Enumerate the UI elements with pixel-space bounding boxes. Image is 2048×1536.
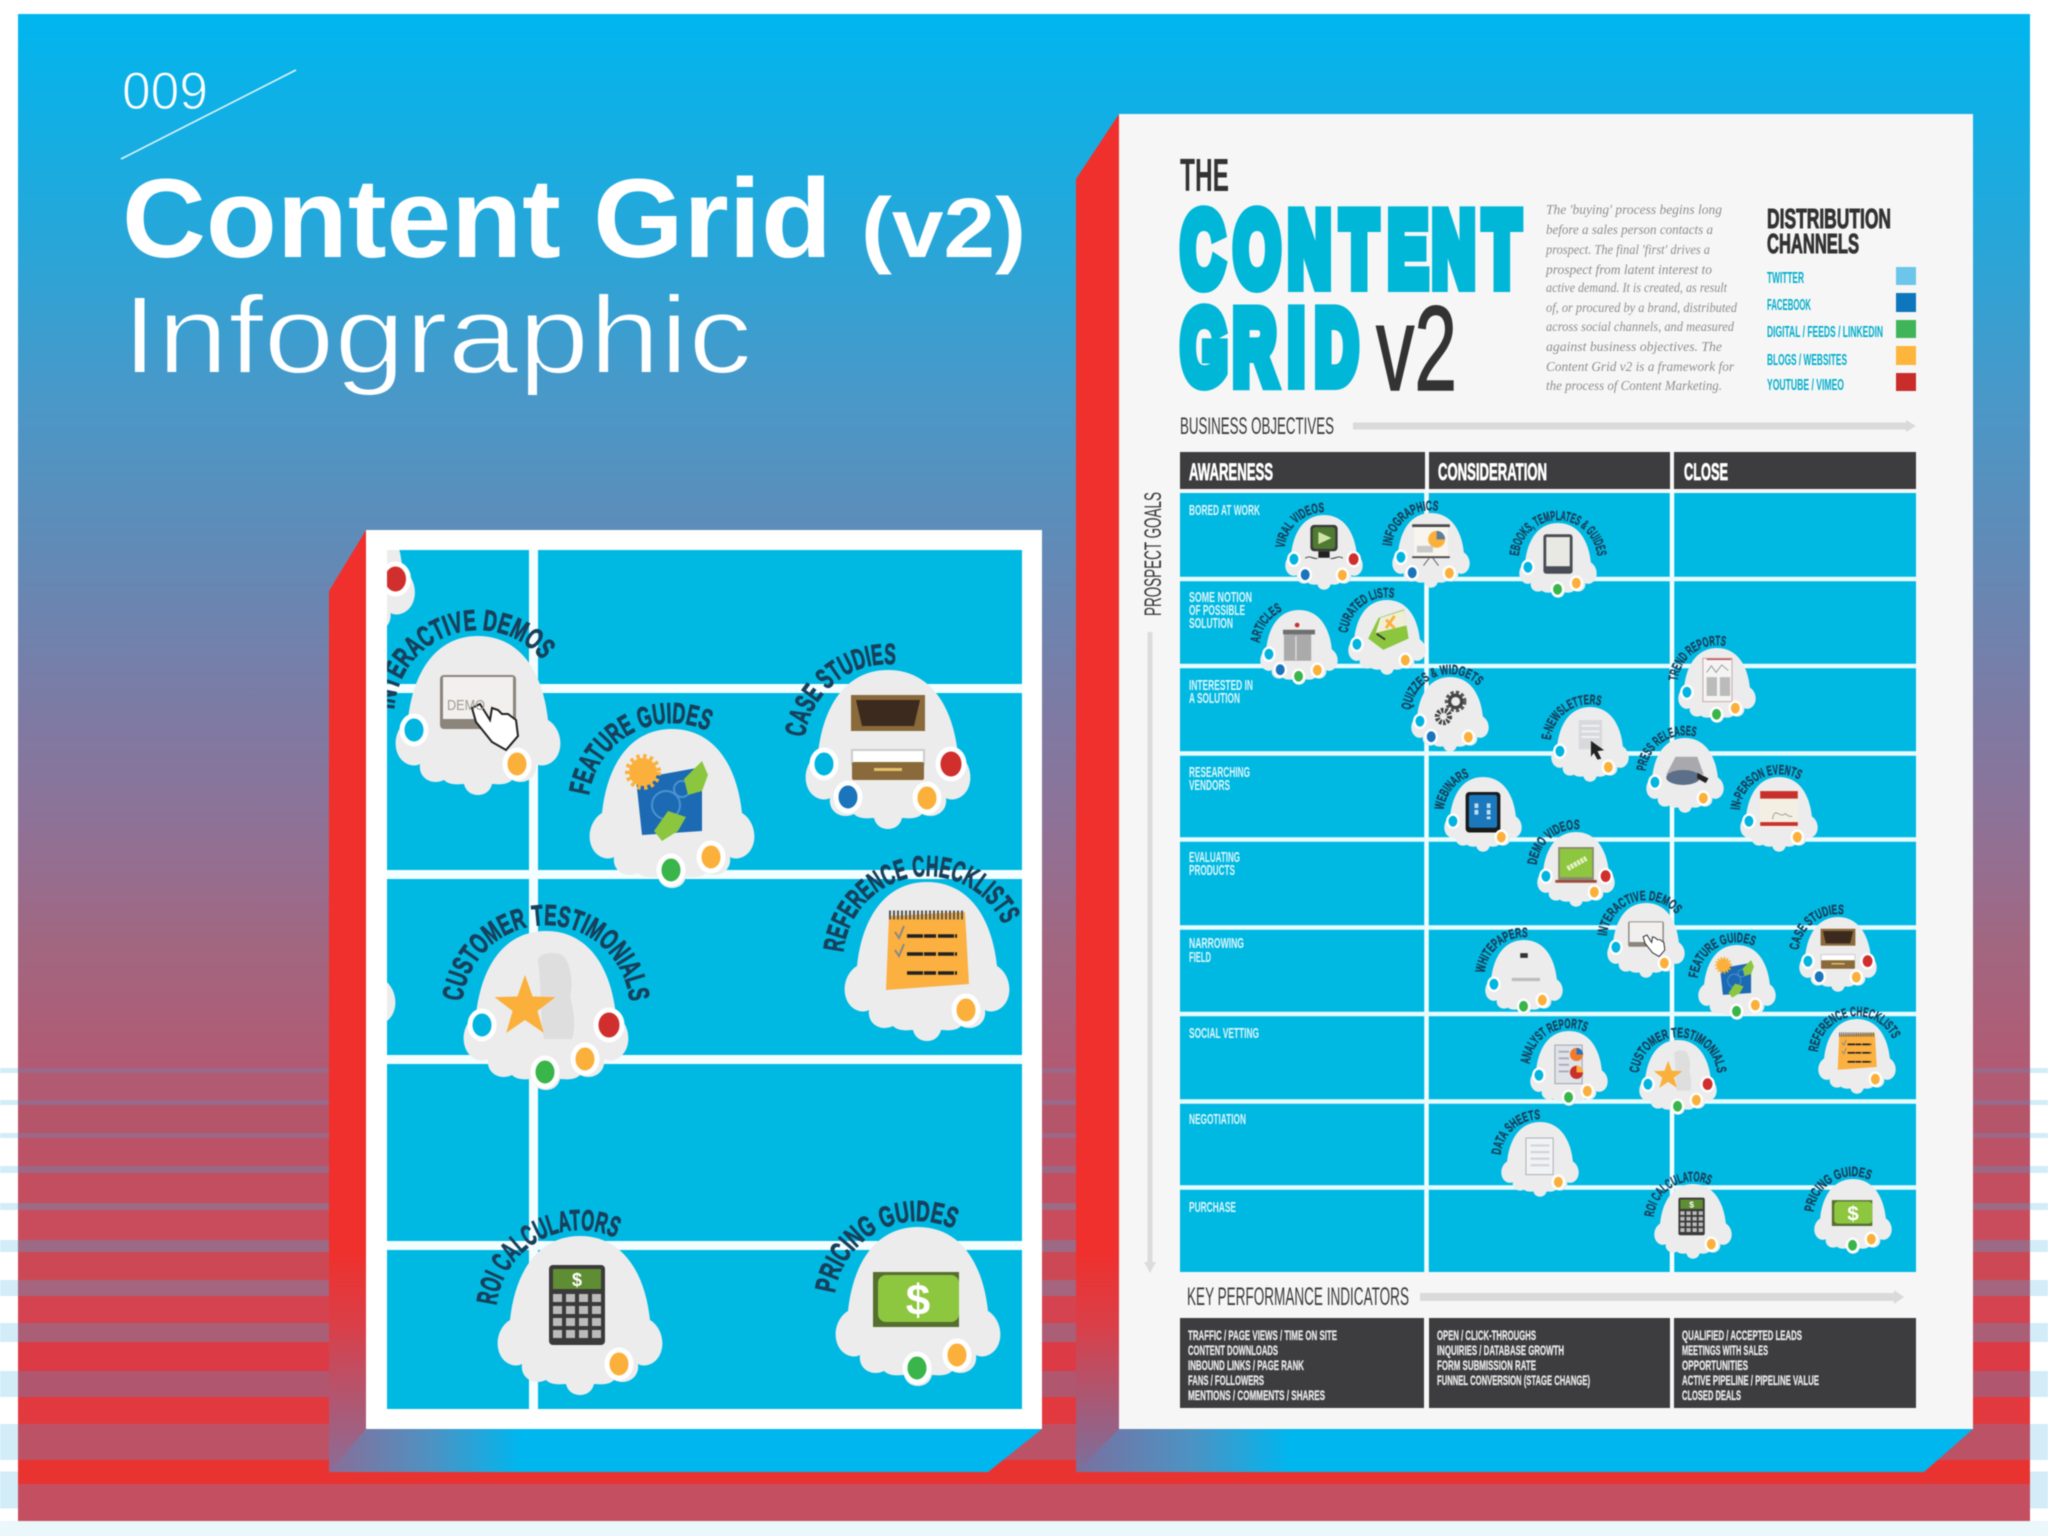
business objectives label and arrow: BUSINESS OBJECTIVES (1180, 413, 1334, 440)
kpi box: awareness: FANS / FOLLOWERS (1188, 1373, 1264, 1388)
bubble: customer testimonials small: CUSTOMER TESTIMONIALS (1628, 1026, 1728, 1074)
bubble: case studies (784, 642, 972, 830)
poster heading (1180, 149, 1520, 416)
bubble: feature guides (568, 702, 756, 889)
bubble: pricing guides: $ (906, 1276, 930, 1325)
title: Infographic (122, 274, 752, 397)
bubble: trend reports (1668, 634, 1756, 724)
bubble: webinars: WEBINARS (1434, 768, 1470, 810)
bubble: in-person events (1730, 764, 1818, 852)
row labels: NEGOTIATION (1189, 1111, 1246, 1128)
poster side faces (1076, 114, 1973, 1472)
bubble: customer testimonials: CUSTOMER TESTIMONIALS (442, 904, 650, 1002)
kpi box: consideration: INQUIRIES / DATABASE GROWTH (1437, 1343, 1564, 1358)
title: Content Grid (122, 156, 832, 281)
bubble: curated lists: CURATED LISTS (1338, 586, 1395, 633)
bubble: roi calculators small (1644, 1170, 1732, 1260)
bubble: analyst reports: ANALYST REPORTS (1520, 1018, 1589, 1064)
bubble: whitepapers (1474, 926, 1564, 1014)
bubble: articles: ARTICLES (1250, 602, 1282, 644)
bubble: quizzes and widgets: QUIZZES & WIDGETS (1400, 664, 1484, 710)
column headers: CONSIDERATION (1438, 459, 1547, 486)
legend: distribution channels: YOUTUBE / VIMEO (1767, 377, 1844, 394)
legend: distribution channels: CHANNELS (1767, 228, 1859, 259)
key performance indicators label and arrow (1187, 1283, 1904, 1311)
bubble: viral videos (1274, 502, 1364, 590)
bubble: press releases (1636, 724, 1724, 814)
bubble: feature guides small: FEATURE GUIDES (1688, 932, 1757, 978)
poster heading: v2 (1376, 280, 1457, 416)
column headers (1180, 452, 1916, 489)
bubble: pricing guides small: PRICING GUIDES (1804, 1166, 1873, 1212)
bubble: reference checklists: REFERENCE CHECKLISTS (822, 854, 1020, 952)
row labels: VENDORS (1189, 777, 1230, 794)
intro paragraph: prospect from latent interest to (1545, 263, 1712, 278)
intro paragraph: The 'buying' process begins long (1546, 203, 1722, 218)
legend: distribution channels (1767, 203, 1916, 394)
bubble: e-newsletters: E-NEWSLETTERS (1540, 694, 1602, 740)
bubble: infographics: INFOGRAPHICS (1382, 500, 1439, 546)
bubble: case studies small: CASE STUDIES (1788, 904, 1844, 950)
bubble: in-person events: IN-PERSON EVENTS (1730, 764, 1803, 810)
kpi box: close: ACTIVE PIPELINE / PIPELINE VALUE (1682, 1373, 1819, 1388)
bubble: interactive demos (386, 608, 562, 796)
prospect goals label and arrow: PROSPECT GOALS (1140, 492, 1167, 616)
legend: distribution channels: TWITTER (1767, 270, 1804, 287)
kpi box: awareness: INBOUND LINKS / PAGE RANK (1188, 1358, 1304, 1373)
title (122, 156, 1026, 397)
bubble: e-newsletters (1540, 694, 1630, 782)
intro paragraph: active demand. It is created, as result (1546, 281, 1728, 296)
number 009 with diagonal rule (121, 62, 296, 159)
legend: distribution channels: DISTRIBUTION (1767, 203, 1891, 234)
bubble: customer testimonials small (1628, 1026, 1728, 1116)
bubble: viral videos: VIRAL VIDEOS (1274, 502, 1325, 548)
legend: distribution channels: DIGITAL / FEEDS / LINKEDIN (1767, 324, 1883, 341)
number 009 with diagonal rule: 009 (122, 62, 208, 121)
kpi box: close: QUALIFIED / ACCEPTED LEADS (1682, 1328, 1802, 1343)
kpi box: awareness (1180, 1318, 1424, 1408)
bubble: roi calculators: ROI CALCULATORS (476, 1208, 622, 1306)
prospect goals label and arrow (1140, 492, 1167, 1273)
bubble: pricing guides: PRICING GUIDES (814, 1200, 960, 1294)
bubble: infographics (1382, 500, 1470, 588)
bubble: pricing guides (814, 1200, 1002, 1387)
column headers: CLOSE (1684, 459, 1728, 486)
bubble: case studies: CASE STUDIES (784, 642, 896, 736)
bubble: customer testimonials (442, 904, 650, 1091)
bubble: data sheets (1490, 1108, 1580, 1198)
bubble: webinars (1434, 768, 1522, 852)
panel side faces (329, 530, 1042, 1472)
row labels: EVALUATING (1189, 849, 1240, 866)
bubble: demo videos (1526, 818, 1616, 908)
row labels (1189, 502, 1260, 1216)
row labels: SOME NOTION (1189, 589, 1252, 606)
bubble: trend reports: TREND REPORTS (1668, 634, 1726, 680)
cropped bubble top left (386, 549, 416, 626)
bubble: roi calculators: $ (572, 1270, 582, 1290)
kpi box: awareness: MENTIONS / COMMENTS / SHARES (1188, 1388, 1325, 1403)
kpi box: awareness: CONTENT DOWNLOADS (1188, 1343, 1278, 1358)
zoomed grid cells (387, 550, 1022, 1409)
bubble: reference checklists small: REFERENCE CHECKLISTS (1808, 1006, 1902, 1052)
bubble: ebooks templates and guides: EBOOKS, TEMPLATES & GUIDES (1508, 510, 1608, 556)
panel: content grid poster (1075, 113, 1974, 1473)
row labels: A SOLUTION (1189, 690, 1240, 707)
intro paragraph: the process of Content Marketing. (1546, 379, 1722, 394)
bubble: roi calculators small: $ (1689, 1200, 1694, 1210)
bubble: articles (1250, 602, 1338, 686)
bubble: whitepapers: WHITEPAPERS (1474, 926, 1528, 972)
legend: distribution channels: BLOGS / WEBSITES (1767, 352, 1847, 369)
poster heading: GRID (1181, 289, 1358, 405)
bubble: data sheets: DATA SHEETS (1490, 1108, 1541, 1156)
content grid (1180, 489, 1916, 1272)
kpi box: close: MEETINGS WITH SALES (1682, 1343, 1768, 1358)
bubble: roi calculators (476, 1208, 664, 1396)
bubble: curated lists (1338, 586, 1426, 676)
column headers: AWARENESS (1189, 459, 1273, 486)
title: (v2) (861, 181, 1026, 275)
row labels: PURCHASE (1189, 1199, 1236, 1216)
bubble: quizzes and widgets (1400, 664, 1490, 752)
kpi box: close: CLOSED DEALS (1682, 1388, 1741, 1403)
business objectives label and arrow (1180, 413, 1916, 440)
kpi box: awareness: TRAFFIC / PAGE VIEWS / TIME ON SITE (1188, 1328, 1337, 1343)
row labels: INTERESTED IN (1189, 677, 1253, 694)
intro paragraph: across social channels, and measured (1546, 320, 1735, 335)
bubble: reference checklists (822, 854, 1020, 1042)
bubble: feature guides small (1688, 932, 1776, 1020)
row labels: BORED AT WORK (1189, 502, 1260, 519)
kpi box: consideration: OPEN / CLICK-THROUGHS (1437, 1328, 1536, 1343)
zoomed bubbles clipped to grid (386, 549, 1020, 1396)
row labels: NARROWING (1189, 935, 1244, 952)
bubble: feature guides: FEATURE GUIDES (568, 702, 714, 796)
poster heading: CONTENT (1181, 191, 1520, 307)
bubble: interactive demos small: INTERACTIVE DEMOS (1596, 890, 1683, 936)
intro paragraph: of, or procured by a brand, distributed (1546, 301, 1738, 316)
intro paragraph: against business objectives. The (1546, 340, 1722, 355)
intro paragraph: before a sales person contacts a (1546, 223, 1713, 238)
bubble: roi calculators small: ROI CALCULATORS (1644, 1170, 1713, 1218)
bubble: demo videos: DEMO VIDEOS (1526, 818, 1580, 866)
bubble: interactive demos: INTERACTIVE DEMOS (386, 608, 556, 710)
row labels: FIELD (1189, 949, 1211, 966)
kpi box: close (1674, 1318, 1916, 1408)
bubble: case studies small (1788, 904, 1878, 992)
bubble: pricing guides small: $ (1847, 1202, 1859, 1225)
bubble: analyst reports (1520, 1018, 1608, 1106)
kpi box: consideration: FORM SUBMISSION RATE (1437, 1358, 1536, 1373)
bubble: interactive demos small (1596, 890, 1686, 978)
cropped bubble left edge (386, 982, 396, 1022)
intro paragraph: prospect. The final 'first' drives a (1545, 243, 1710, 258)
kpi box: close: OPPORTUNITIES (1682, 1358, 1748, 1373)
row labels: SOLUTION (1189, 615, 1233, 632)
kpi box: consideration: FUNNEL CONVERSION (STAGE CHANGE) (1437, 1373, 1590, 1388)
panel: zoomed grid detail (328, 529, 1043, 1473)
kpi box: consideration (1429, 1318, 1670, 1408)
legend: distribution channels: FACEBOOK (1767, 297, 1811, 314)
row labels: OF POSSIBLE (1189, 602, 1245, 619)
bubble: pricing guides small (1804, 1166, 1892, 1254)
bubble: reference checklists small (1808, 1006, 1902, 1094)
bubble: press releases: PRESS RELEASES (1636, 724, 1698, 772)
bubble: ebooks templates and guides (1508, 510, 1608, 598)
intro paragraph (1545, 203, 1738, 394)
poster heading: THE (1180, 149, 1229, 201)
key performance indicators label and arrow: KEY PERFORMANCE INDICATORS (1187, 1283, 1409, 1311)
bubble: interactive demos: DEMO (447, 697, 485, 714)
row labels: PRODUCTS (1189, 862, 1235, 879)
row labels: RESEARCHING (1189, 764, 1250, 781)
row labels: SOCIAL VETTING (1189, 1025, 1259, 1042)
intro paragraph: Content Grid v2 is a framework for (1546, 360, 1735, 375)
